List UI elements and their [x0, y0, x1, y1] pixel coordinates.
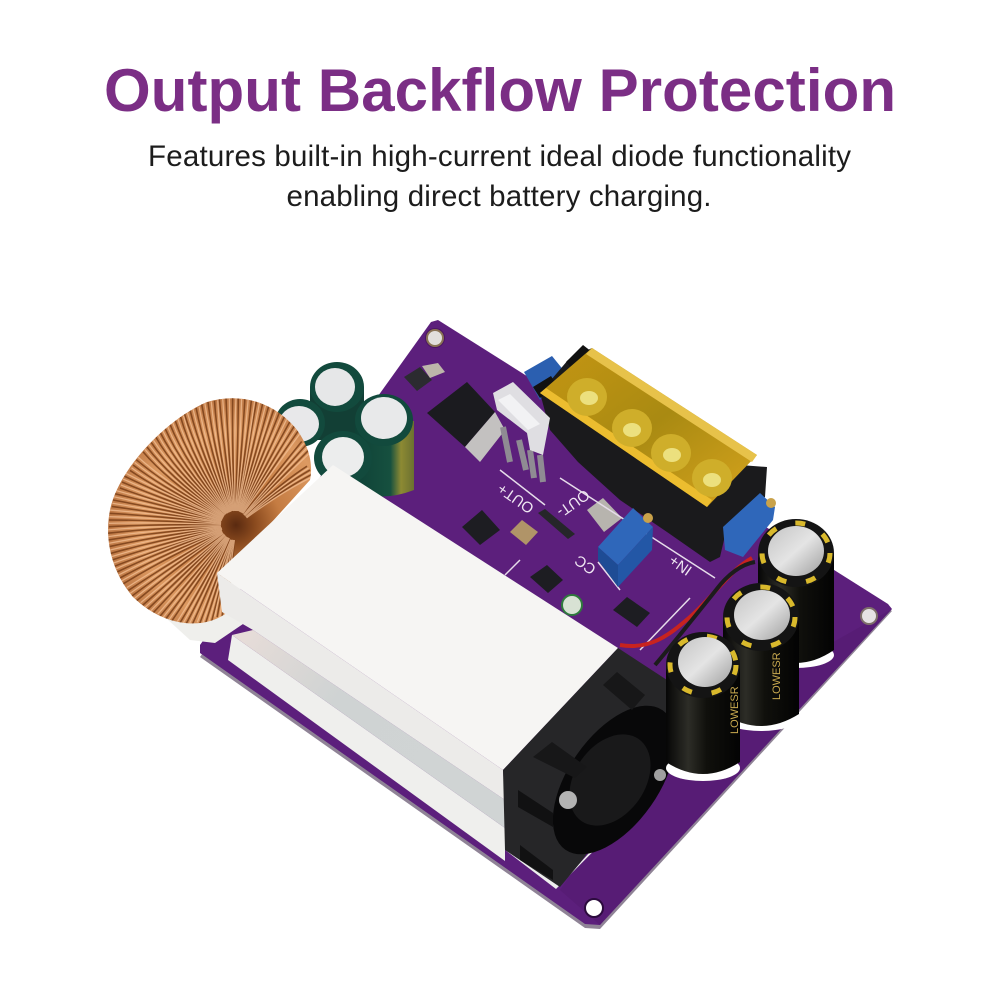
- white top block: [217, 465, 618, 800]
- board components: CC: [572, 551, 599, 578]
- fuse: [493, 382, 550, 482]
- board components: IN+: [666, 551, 695, 579]
- copper toroid coil: [108, 398, 312, 624]
- title: Output Backflow Protection: [104, 57, 896, 124]
- red and black wires: [620, 558, 755, 665]
- green capacitors: [275, 362, 414, 496]
- silkscreen strip under fan: [505, 785, 657, 889]
- subtitle: Features built-in high-current ideal diode functionality: [148, 140, 851, 173]
- cooling fan: [503, 648, 700, 887]
- subtitle: enabling direct battery charging.: [286, 180, 712, 213]
- white toroid core: [166, 610, 243, 643]
- subtitle: [148, 140, 851, 213]
- heat sink rails: [228, 630, 505, 861]
- black electrolytic capacitors: [666, 519, 834, 781]
- black electrolytic capacitors: LOWESR: [771, 652, 783, 700]
- board components: OUT-: [553, 486, 592, 520]
- board components: OUT+: [494, 479, 537, 517]
- board components: [404, 363, 715, 650]
- terminal block with yellow cover: [524, 345, 767, 562]
- blue trimmers: [598, 493, 776, 587]
- black electrolytic capacitors: LOWESR: [729, 686, 741, 734]
- circuit board: [200, 320, 892, 929]
- power module product photo: [99, 320, 892, 929]
